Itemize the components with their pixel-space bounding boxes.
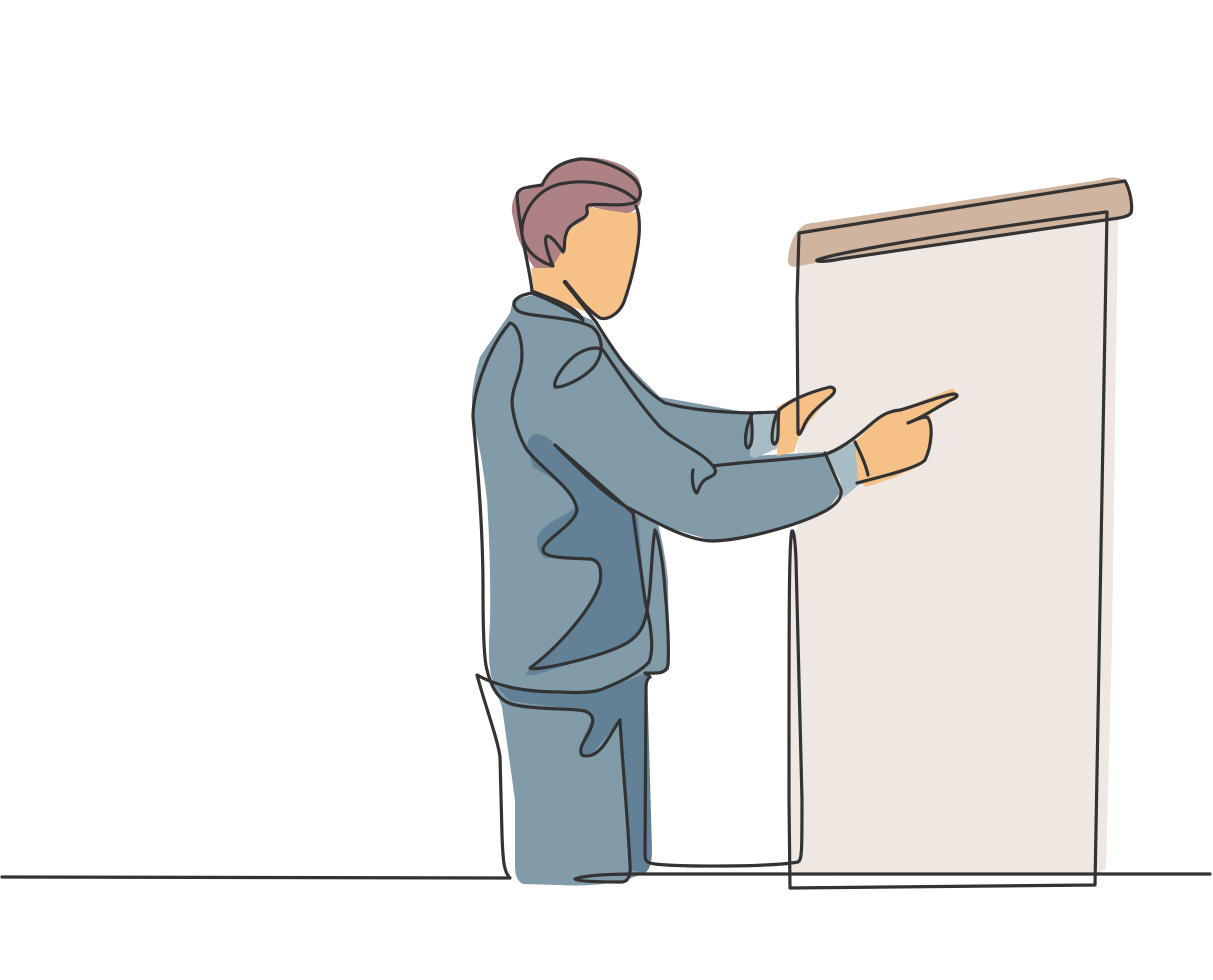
face contour and neck stroke: [565, 206, 777, 413]
back cuff loops: [745, 414, 752, 448]
back hand and chart edge: [779, 181, 1132, 434]
suit: [472, 295, 840, 886]
trousers and hem: [483, 590, 1210, 882]
back hand: [777, 387, 835, 456]
front hand: [855, 388, 957, 487]
figure fill: presenter: [472, 158, 957, 886]
front arm top edge and pointing hand: [713, 394, 957, 483]
panel: flip chart paper: [789, 216, 1118, 876]
hair: [512, 158, 642, 269]
front cuff line: [855, 442, 868, 475]
panel: flip chart header: [788, 178, 1132, 267]
suit shadow: trousers: [497, 673, 652, 873]
ground line and left jacket edge: [2, 445, 841, 878]
thick neck stroke: [565, 282, 586, 308]
suit shadow: torso: [525, 434, 645, 675]
sleeve, collar and hair line: [514, 159, 715, 493]
back cuff: [750, 412, 778, 458]
face and neck: [531, 207, 640, 319]
front cuff: [825, 442, 868, 498]
body, back and shoulder contour: [473, 212, 1107, 888]
continuous line drawing: [2, 159, 1210, 888]
